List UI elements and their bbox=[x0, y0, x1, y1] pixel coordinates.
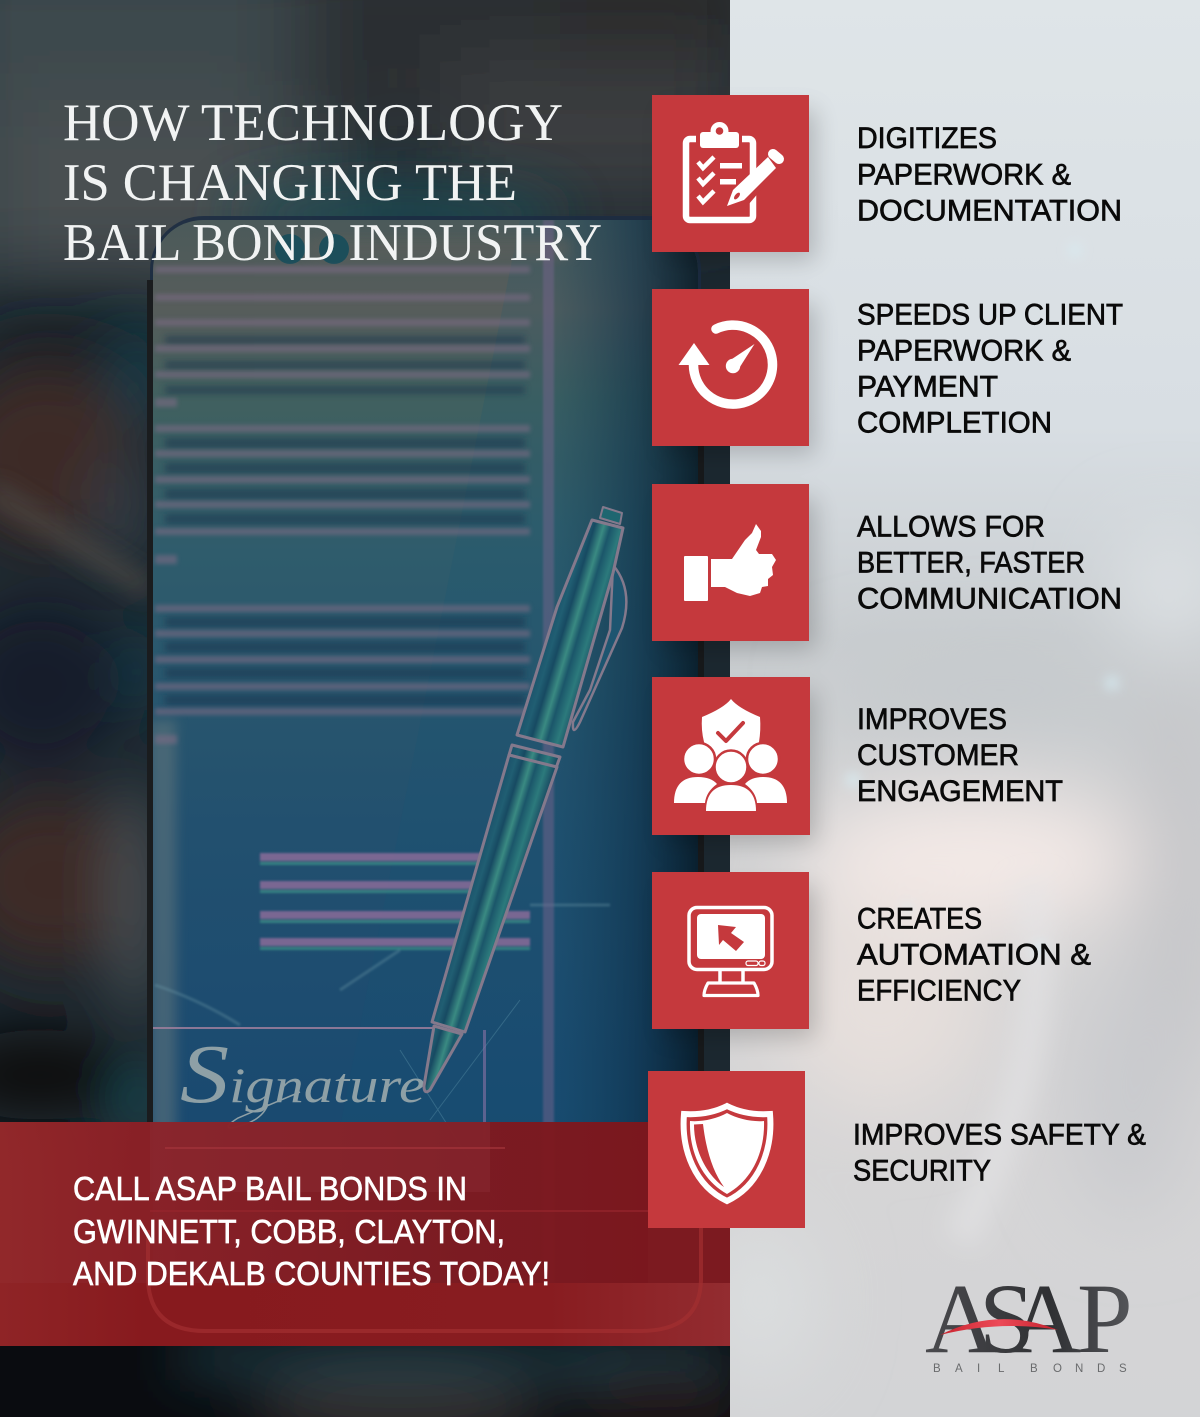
label bbox=[857, 510, 1122, 616]
label: IMPROVES SAFETY & bbox=[853, 1118, 1146, 1152]
signature line bbox=[152, 1027, 437, 1029]
title: BAIL BOND INDUSTRY bbox=[63, 214, 602, 272]
label: CUSTOMER bbox=[857, 739, 1019, 772]
title: HOW TECHNOLOGY bbox=[63, 94, 563, 152]
title: IS CHANGING THE bbox=[63, 154, 517, 212]
label: IMPROVES bbox=[857, 703, 1007, 736]
item 3: communication bbox=[652, 484, 1122, 641]
label: DIGITIZES bbox=[857, 122, 997, 155]
icon: thumbs up bbox=[652, 484, 809, 641]
label: ALLOWS FOR bbox=[857, 510, 1045, 544]
pen bbox=[424, 507, 626, 1092]
label bbox=[857, 703, 1063, 808]
call to action text bbox=[73, 1170, 550, 1292]
item 4: engagement bbox=[652, 677, 1063, 835]
item 6: safety bbox=[648, 1071, 1146, 1228]
signature: Signature bbox=[180, 1028, 425, 1121]
icon: monitor with cursor bbox=[652, 872, 809, 1029]
panel: red call to action bbox=[0, 1122, 730, 1346]
label: BETTER, FASTER bbox=[857, 546, 1085, 580]
logo: ASAP Bail Bonds: BAILBONDS bbox=[933, 1363, 1127, 1375]
label: SECURITY bbox=[853, 1154, 991, 1188]
icon: clipboard and pencil bbox=[652, 95, 809, 252]
label: ENGAGEMENT bbox=[857, 775, 1063, 808]
label: EFFICIENCY bbox=[857, 974, 1021, 1008]
call to action text: GWINNETT, COBB, CLAYTON, bbox=[73, 1213, 505, 1250]
label: COMMUNICATION bbox=[857, 582, 1122, 616]
icon: timer with arrow bbox=[652, 289, 809, 446]
vertical edge of document bbox=[543, 220, 554, 1328]
label bbox=[857, 298, 1123, 440]
icon: group with shield bbox=[652, 677, 810, 835]
item 5: automation bbox=[652, 872, 1091, 1029]
label: COMPLETION bbox=[857, 406, 1052, 440]
item 1: digitizes paperwork bbox=[652, 95, 1122, 252]
label bbox=[857, 902, 1091, 1008]
label: PAYMENT bbox=[857, 370, 998, 404]
label bbox=[857, 122, 1122, 228]
icon: shield bbox=[648, 1071, 805, 1228]
label: SPEEDS UP CLIENT bbox=[857, 298, 1123, 332]
item 2: speeds up bbox=[652, 289, 1123, 446]
call to action text: AND DEKALB COUNTIES TODAY! bbox=[73, 1255, 550, 1292]
label: DOCUMENTATION bbox=[857, 194, 1122, 228]
title bbox=[63, 94, 602, 272]
label: PAPERWORK & bbox=[857, 158, 1071, 192]
panel: left dark photo background bbox=[0, 0, 760, 1417]
label bbox=[853, 1118, 1146, 1188]
document lines bbox=[155, 266, 530, 950]
call to action text: CALL ASAP BAIL BONDS IN bbox=[73, 1170, 467, 1207]
label: AUTOMATION & bbox=[857, 938, 1091, 972]
logo: ASAP Bail Bonds: ASAP bbox=[925, 1263, 1133, 1374]
icon tile shadows bbox=[665, 110, 815, 1037]
phone with stylised document bbox=[147, 216, 704, 1122]
panel: right light background bbox=[710, 0, 1200, 1417]
label: PAPERWORK & bbox=[857, 334, 1071, 368]
label: CREATES bbox=[857, 902, 982, 936]
